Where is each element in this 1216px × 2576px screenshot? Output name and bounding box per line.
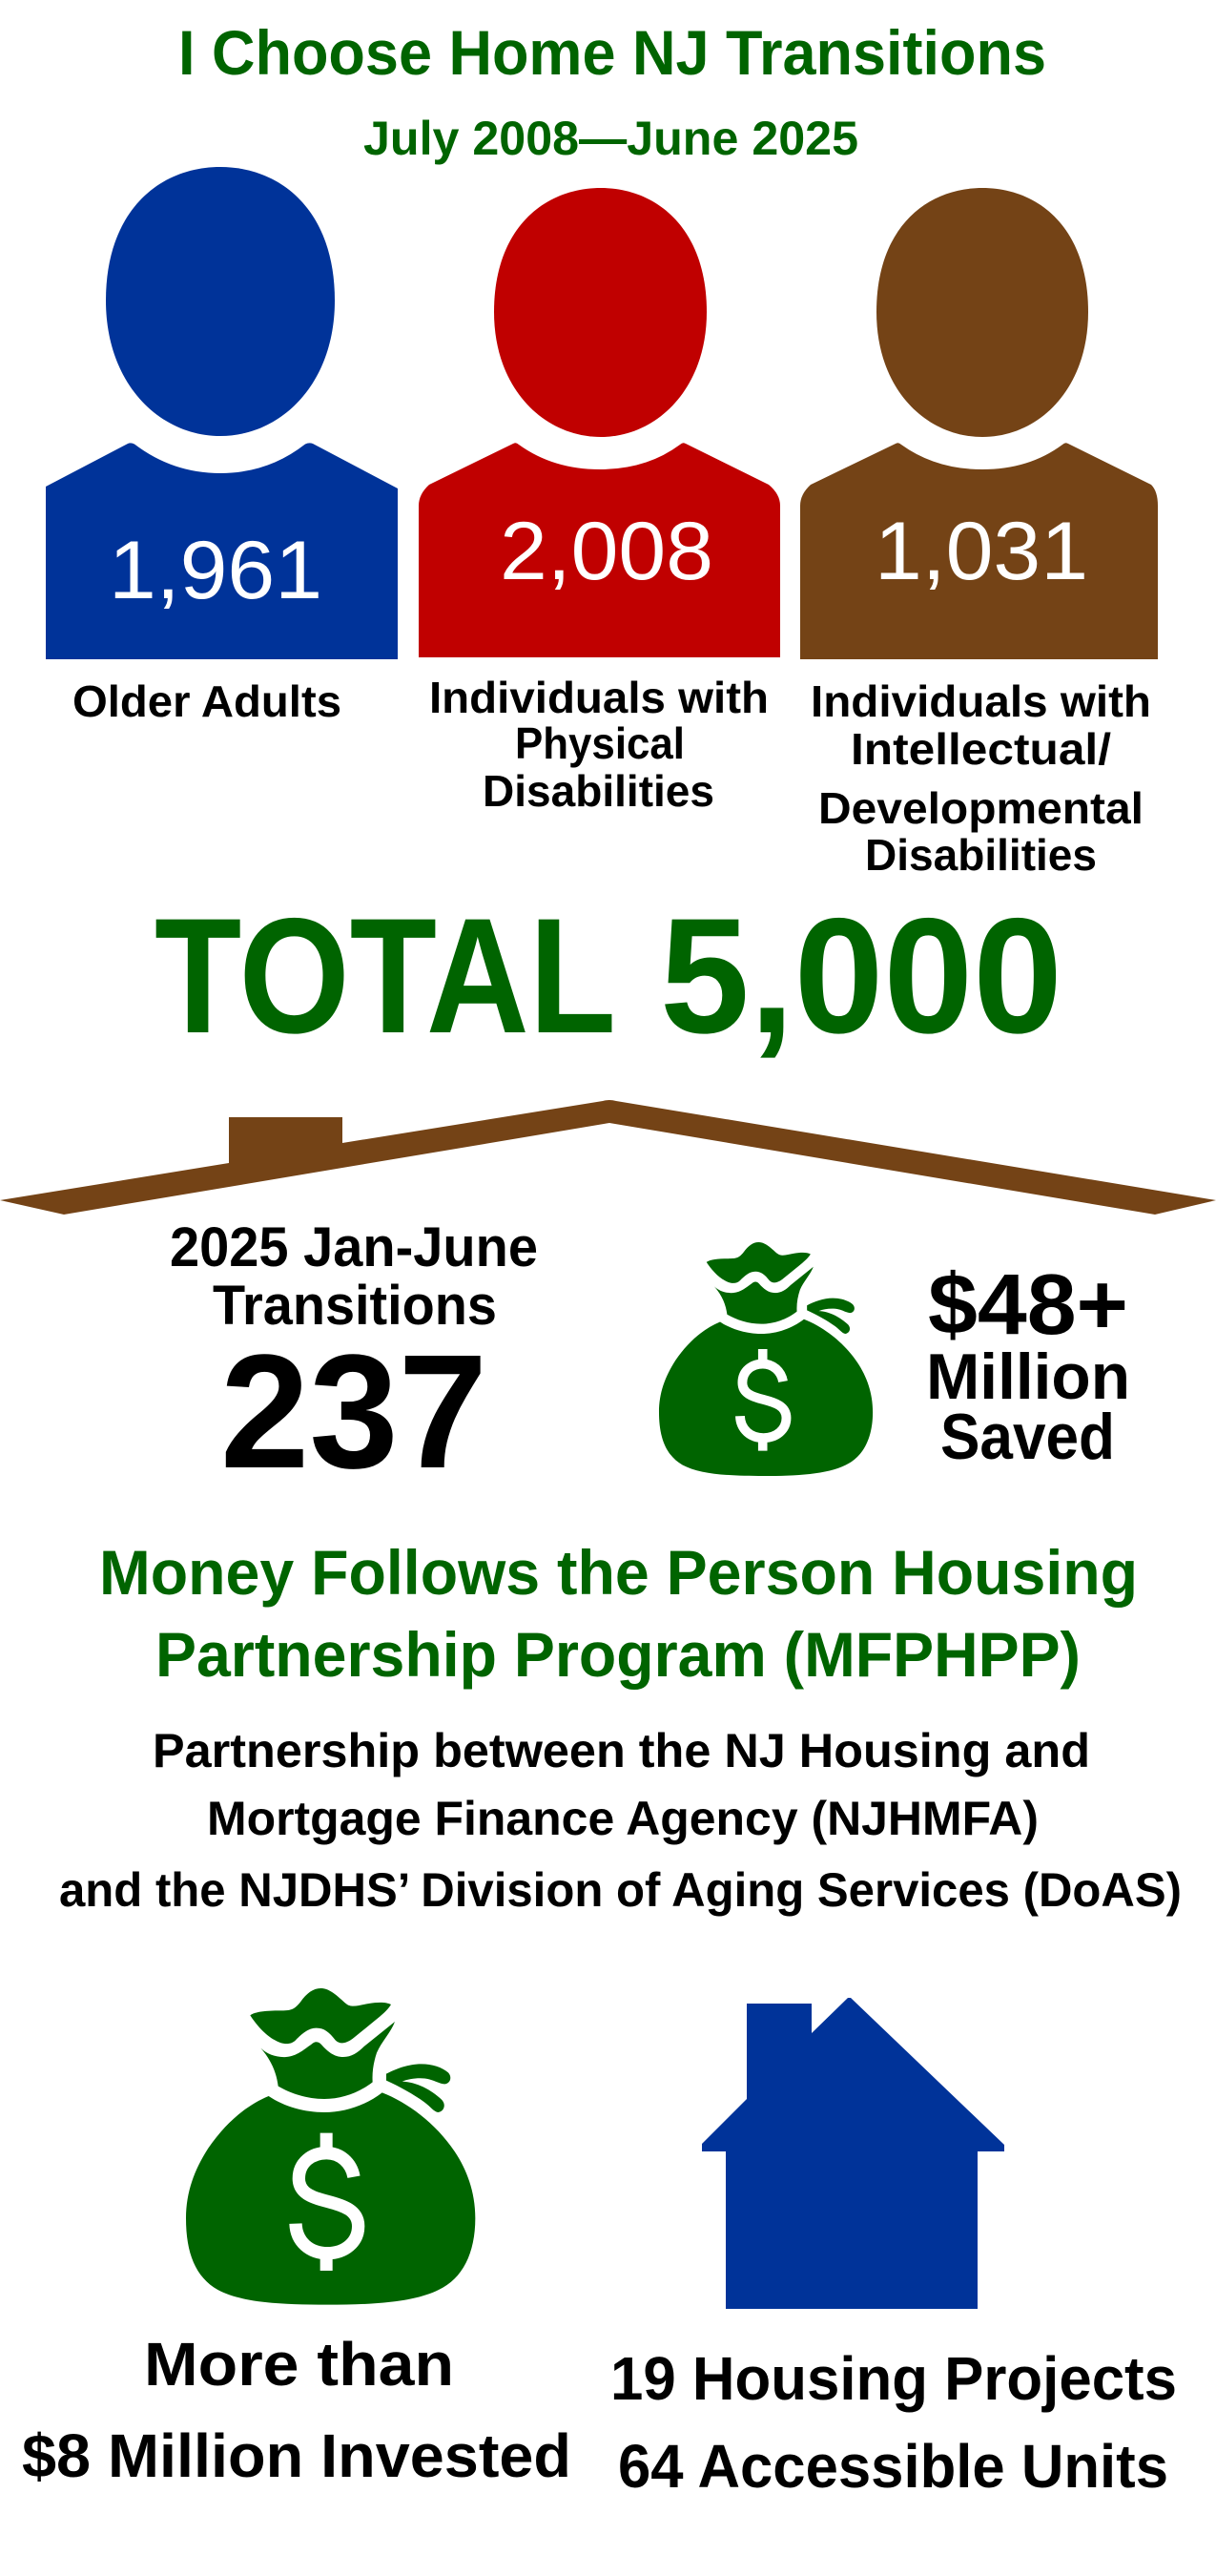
number: 237: 237 [220, 1321, 487, 1503]
heading: housing partnership program: Partnership Program (MFPHPP) [155, 1619, 1081, 1690]
heading: housing partnership program [99, 1537, 1138, 1690]
icon: blue house [702, 1998, 1004, 2309]
title: I Choose Home NJ Transitions [178, 17, 1046, 88]
label: physical disabilities: Individuals with [429, 673, 769, 722]
panel: recent transitions [170, 1216, 538, 1503]
total count: 5,000 [660, 884, 1062, 1068]
label: million: Million [926, 1340, 1130, 1413]
label: physical disabilities: Disabilities [483, 766, 714, 816]
label: 2025 Jan-June: 2025 Jan-June [170, 1216, 538, 1278]
label: saved: Saved [940, 1401, 1115, 1473]
text block: partnership description: and the NJDHS’ Division of Aging Services (DoAS) [59, 1863, 1182, 1917]
label: intellectual and developmental disabilities: Individuals with [811, 676, 1151, 726]
icon: small money bag [659, 1242, 873, 1476]
label: older adults: Older Adults [72, 676, 341, 726]
icon: red person [419, 188, 780, 657]
total count [155, 884, 1062, 1068]
text block: money invested: More than [144, 2330, 454, 2399]
heading: housing partnership program: Money Follows the Person Housing [99, 1537, 1138, 1608]
number: intellectual and developmental disabilities: 1,031 [875, 506, 1088, 597]
subtitle: date range: July 2008—June 2025 [363, 112, 858, 165]
label: intellectual and developmental disabilities: Disabilities [865, 830, 1097, 880]
label: intellectual and developmental disabilities: Intellectual/ [851, 724, 1111, 774]
text block: housing projects and units: 19 Housing Projects [610, 2344, 1177, 2413]
label: transitions: Transitions [213, 1275, 497, 1337]
text block: partnership description: Partnership between the NJ Housing and [153, 1724, 1090, 1777]
panel: older adults [46, 167, 398, 726]
icon: blue person [46, 167, 398, 659]
text block: partnership description [59, 1724, 1182, 1917]
text block: partnership description: Mortgage Finance Agency (NJHMFA) [207, 1792, 1039, 1845]
icon: brown person [800, 188, 1158, 659]
label: intellectual and developmental disabilities [811, 676, 1151, 880]
text block: money invested [22, 2330, 571, 2490]
text block: money invested: $8 Million Invested [22, 2421, 571, 2490]
total count: TOTAL [155, 884, 616, 1068]
icon: large money bag [186, 1988, 475, 2305]
label: physical disabilities [429, 673, 769, 816]
panel: physical disabilities [419, 188, 780, 816]
panel: intellectual and developmental disabilities [800, 188, 1158, 880]
panel: money saved [926, 1257, 1130, 1473]
text block: housing projects and units: 64 Accessible Units [618, 2432, 1168, 2501]
number: physical disabilities: 2,008 [500, 506, 713, 597]
label: intellectual and developmental disabilities: Developmental [818, 783, 1144, 833]
label: physical disabilities: Physical [515, 718, 685, 768]
number: older adults: 1,961 [109, 525, 322, 616]
icon: roof with chimney [0, 1100, 1216, 1215]
amount: $48+: $48+ [928, 1257, 1128, 1353]
text block: housing projects and units [610, 2344, 1177, 2501]
